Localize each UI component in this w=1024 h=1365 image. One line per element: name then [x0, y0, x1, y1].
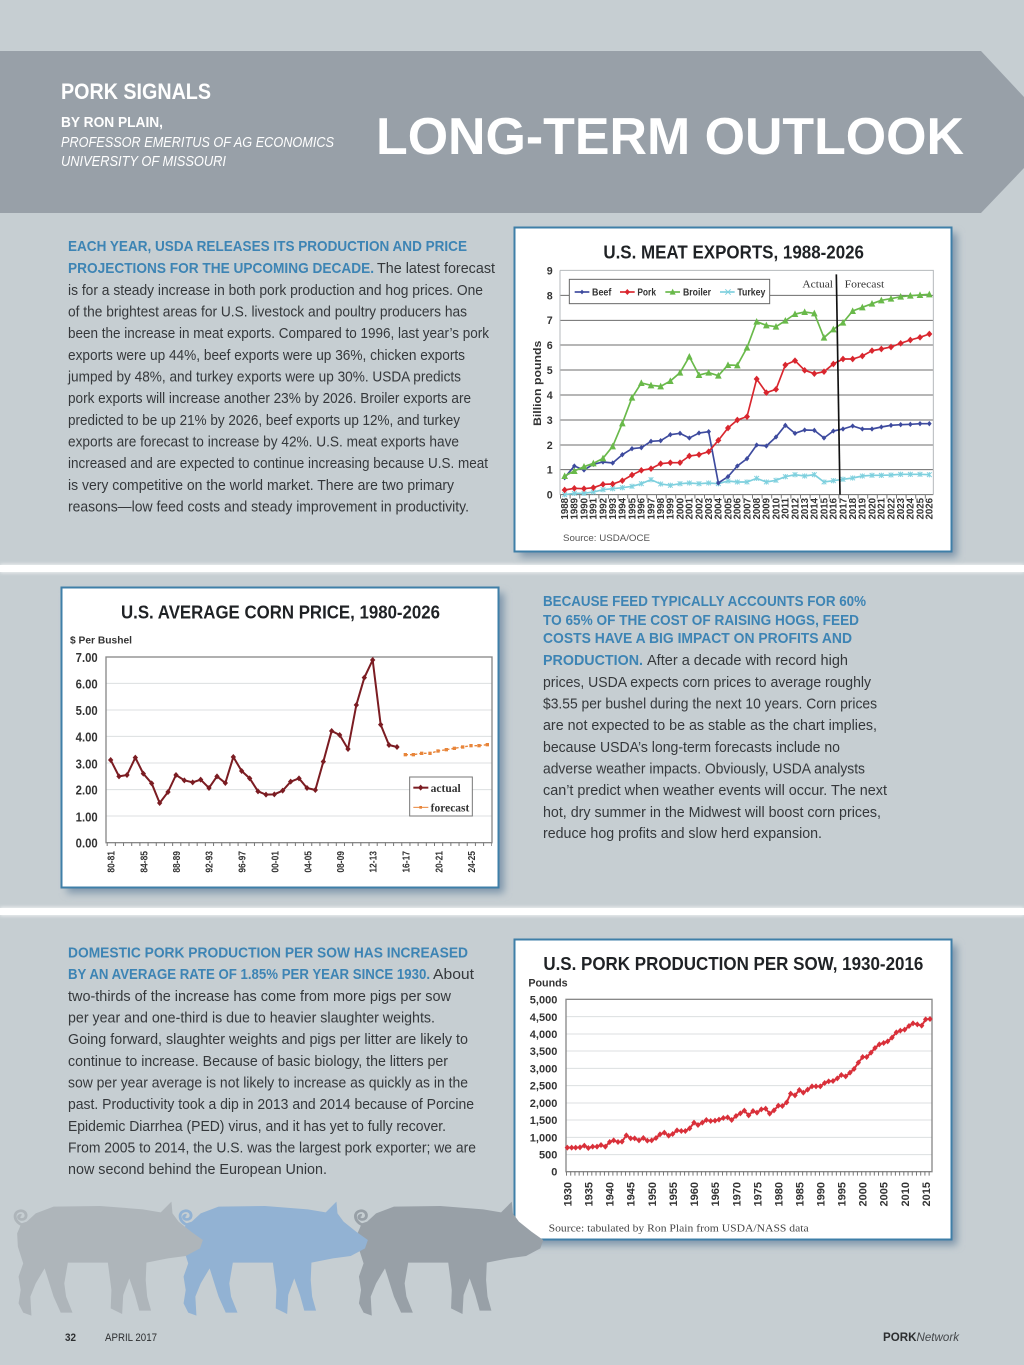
icon: light gray pig	[15, 1202, 203, 1316]
y axis labels: 1,500	[530, 1115, 557, 1127]
x axis labels: 1955	[668, 1182, 680, 1206]
byline: PROFESSOR EMERITUS OF AG ECONOMICS	[61, 134, 334, 151]
text block: meat exports: exports were up 44%, beef exports were up 36%, chicken exports	[68, 347, 465, 364]
text block: feed costs: After a decade with record high	[647, 652, 848, 669]
series: actual	[111, 660, 397, 803]
legend: Broiler	[683, 287, 711, 298]
text block: meat exports: predicted to be up 21% by 2026, beef exports up 12%, and turkey	[68, 412, 460, 429]
series: beef	[565, 424, 929, 483]
x axis year labels: 2008	[752, 497, 763, 519]
x axis year labels: 2007	[742, 498, 753, 519]
x axis labels: 12-13	[369, 850, 380, 873]
text block: production per sow: per year and one-third is due to heavier slaughter weights.	[68, 1010, 435, 1026]
text block: production per sow: From 2005 to 2014, the U.S. was the largest pork exporter; we are	[68, 1140, 476, 1156]
series: pounds per sow	[567, 1019, 930, 1148]
x axis labels: 96-97	[237, 851, 248, 873]
x axis year labels: 2003	[704, 497, 715, 519]
x axis labels: 1930	[563, 1182, 575, 1206]
legend	[569, 279, 770, 304]
x axis labels: 1980	[773, 1182, 785, 1206]
x axis year labels: 2020	[867, 498, 878, 519]
text block: feed costs: BECAUSE FEED TYPICALLY ACCOUNTS FOR 60%	[543, 593, 866, 610]
chart title: U.S. MEAT EXPORTS, 1988-2026	[603, 242, 864, 262]
x axis year labels: 2022	[886, 498, 897, 519]
legend: Pork	[637, 287, 656, 298]
y axis labels: 4	[547, 390, 553, 402]
panel: U.S. meat exports chart	[514, 228, 957, 557]
text block: production per sow: About	[433, 966, 475, 983]
y axis labels: 3,000	[530, 1063, 557, 1075]
y axis labels: 6	[547, 340, 553, 352]
y axis labels: 3	[547, 415, 553, 427]
x axis year labels: 2002	[694, 498, 705, 519]
y axis labels: 1,000	[530, 1132, 557, 1144]
pig silhouettes	[14, 1202, 544, 1316]
x axis year labels: 2001	[685, 497, 696, 519]
x axis year labels: 2018	[848, 497, 859, 519]
x axis year labels: 2024	[906, 497, 917, 519]
y axis labels	[530, 994, 557, 1179]
text block: production per sow: Epidemic Diarrhea (PED) virus, and it has yet to fully recover.	[68, 1118, 446, 1135]
footer: page number and date: 32	[65, 1332, 76, 1344]
text block: meat exports: reasons—low feed costs and steady improvement in productivity.	[68, 498, 469, 516]
x axis year labels: 2000	[675, 498, 686, 519]
y axis labels: 1.00	[76, 809, 98, 824]
x axis labels: 1960	[689, 1182, 701, 1206]
panel: U.S. average corn price chart	[62, 588, 504, 893]
text block: feed costs: adverse weather impacts. Obviously, USDA analysts	[543, 760, 865, 778]
y axis labels: 2.00	[76, 783, 98, 798]
text block: feed costs: TO 65% OF THE COST OF RAISING HOGS, FEED	[543, 612, 859, 629]
y axis title: Billion pounds	[532, 341, 544, 426]
legend: actual	[431, 781, 461, 795]
y axis labels: 4,000	[530, 1029, 557, 1041]
x axis year labels	[560, 497, 936, 519]
source note: Source: USDA/OCE	[563, 533, 650, 543]
y axis labels: 0.00	[76, 836, 98, 851]
x axis labels: 08-09	[336, 850, 347, 873]
x axis year labels: 2023	[896, 497, 907, 519]
icon: blue pig	[180, 1202, 368, 1316]
text block: meat exports: been the increase in meat exports. Compared to 1996, last year’s pork	[68, 325, 489, 342]
x axis year labels: 1996	[637, 497, 648, 519]
x axis year labels: 2019	[858, 497, 869, 519]
text block: meat exports: jumped by 48%, and turkey exports were up 30%. USDA predicts	[67, 368, 461, 386]
y axis labels: 2,500	[530, 1081, 557, 1093]
x axis year labels: 2021	[877, 497, 888, 519]
y axis labels: 1	[547, 465, 553, 477]
series: turkey	[565, 474, 929, 495]
x axis labels: 2000	[858, 1182, 870, 1206]
text block: feed costs: PRODUCTION.	[543, 652, 643, 669]
panel: U.S. pork production per sow chart	[514, 940, 957, 1245]
legend: Beef	[592, 287, 612, 298]
x axis labels: 1970	[731, 1182, 743, 1206]
x axis year labels: 2015	[819, 497, 830, 519]
x axis labels: 92-93	[205, 850, 216, 873]
text block: feed costs: are not expected to be as stable as the chart implies,	[543, 717, 877, 734]
series: broiler	[565, 294, 929, 476]
legend: Turkey	[737, 287, 766, 298]
text block: feed costs: hot, dry summer in the Midwest will boost corn prices,	[543, 804, 881, 821]
text block: meat exports: PROJECTIONS FOR THE UPCOMING DECADE.	[68, 260, 374, 277]
y axis labels: 2	[547, 440, 553, 452]
footer: page number and date: APRIL 2017	[105, 1332, 157, 1344]
legend	[410, 777, 472, 816]
x axis year labels: 1995	[627, 497, 638, 519]
text block: feed costs: $3.55 per bushel during the next 10 years. Corn prices	[543, 696, 877, 712]
x axis year labels: 2017	[838, 498, 849, 519]
text block: meat exports: is for a steady increase in both pork production and hog prices. One	[68, 282, 483, 299]
source note: Source: tabulated by Ron Plain from USDA/NASS data	[549, 1224, 809, 1235]
x axis year labels: 1999	[666, 497, 677, 519]
text block: meat exports: EACH YEAR, USDA RELEASES ITS PRODUCTION AND PRICE	[68, 238, 467, 255]
y axis labels: 2,000	[530, 1098, 557, 1110]
y axis labels: 8	[547, 290, 553, 302]
text block: meat exports	[67, 238, 496, 516]
actual / forecast divider: Forecast	[845, 279, 884, 290]
series: forecast	[405, 745, 487, 755]
x axis labels	[563, 1182, 933, 1206]
x axis labels: 84-85	[139, 850, 150, 873]
x axis year labels: 2025	[915, 497, 926, 519]
x axis labels: 80-81	[107, 850, 118, 873]
x axis labels: 1950	[647, 1182, 659, 1206]
x axis year labels: 1997	[646, 498, 657, 519]
x axis year labels: 1989	[570, 497, 581, 519]
actual / forecast divider	[801, 274, 886, 495]
y axis labels: 5,000	[530, 994, 557, 1006]
chart title: U.S. AVERAGE CORN PRICE, 1980-2026	[121, 602, 440, 622]
text block: feed costs	[543, 593, 888, 842]
x axis labels: 1935	[584, 1182, 596, 1206]
text block: meat exports: exports are forecast to increase by 42%. U.S. meat exports have	[68, 434, 459, 450]
y axis labels: 4,500	[530, 1012, 557, 1024]
text block: production per sow	[68, 944, 476, 1178]
y axis labels	[76, 650, 98, 851]
text block: feed costs: reduce hog profits and slow herd expansion.	[543, 825, 822, 842]
text block: production per sow: past. Productivity took a dip in 2013 and 2014 because of Porcine	[68, 1096, 474, 1113]
x axis year labels: 2006	[733, 497, 744, 519]
x axis year labels: 2009	[762, 497, 773, 519]
series: pork	[565, 334, 929, 490]
x axis labels: 1965	[710, 1182, 722, 1206]
x axis labels: 00-01	[270, 850, 281, 873]
y axis labels: 0	[547, 489, 553, 501]
x axis labels: 2010	[900, 1182, 912, 1206]
text block: meat exports: increased and are expected to continue increasing because U.S. meat	[68, 455, 489, 472]
text block: meat exports: is very competitive on the world market. There are two primary	[68, 477, 454, 494]
y axis labels: 9	[547, 265, 553, 277]
text block: feed costs: because USDA’s long-term forecasts include no	[543, 739, 840, 756]
text block: meat exports: pork exports will increase another 23% by 2026. Broiler exports are	[68, 390, 471, 407]
y axis labels: 5	[547, 365, 553, 377]
text block: production per sow: DOMESTIC PORK PRODUCTION PER SOW HAS INCREASED	[68, 944, 468, 962]
x axis labels: 20-21	[434, 850, 445, 873]
banner arrow shape	[0, 51, 1024, 213]
text block: meat exports: The latest forecast	[377, 260, 496, 277]
y axis labels: 7.00	[76, 650, 98, 665]
text block: production per sow: BY AN AVERAGE RATE OF 1.85% PER YEAR SINCE 1930.	[68, 966, 430, 983]
x axis year labels: 1990	[579, 498, 590, 519]
y axis labels: 3,500	[530, 1046, 557, 1058]
y axis labels: 0	[551, 1167, 557, 1179]
text block: meat exports: of the brightest areas for U.S. livestock and poultry producers has	[68, 304, 467, 320]
x axis year labels: 2016	[829, 497, 840, 519]
x axis year labels: 2010	[771, 498, 782, 519]
x axis labels: 2005	[879, 1182, 891, 1206]
y axis labels: 500	[539, 1150, 557, 1162]
header banner	[0, 51, 1024, 213]
x axis labels: 04-05	[303, 850, 314, 873]
y axis unit: Pounds	[528, 977, 568, 989]
y axis labels: 6.00	[76, 676, 98, 691]
x axis year labels: 1988	[560, 497, 571, 519]
x axis labels: 2015	[921, 1182, 933, 1206]
text block: production per sow: continue to increase. Because of basic biology, the litters per	[68, 1053, 448, 1070]
legend: forecast	[431, 801, 469, 815]
main title: LONG-TERM OUTLOOK	[376, 108, 964, 166]
x axis year labels: 1998	[656, 497, 667, 519]
text block: feed costs: prices, USDA expects corn prices to average roughly	[543, 674, 871, 691]
x axis labels: 24-25	[467, 850, 478, 873]
text block: production per sow: sow per year average is not likely to increase as quickly as in the	[68, 1074, 468, 1092]
y axis labels: 4.00	[76, 729, 98, 744]
x axis year labels: 2013	[800, 497, 811, 519]
x axis labels	[107, 850, 478, 873]
x axis labels: 16-17	[401, 851, 412, 873]
y axis labels	[547, 265, 553, 501]
x axis year labels: 1994	[618, 497, 629, 519]
footer: publication name: PORKNetwork	[883, 1332, 960, 1344]
x axis labels: 1990	[816, 1182, 828, 1206]
text block: feed costs: can’t predict when weather events will occur. The next	[543, 782, 888, 799]
byline	[61, 114, 334, 170]
section label: PORK SIGNALS	[61, 79, 211, 104]
icon: dark gray pig	[355, 1202, 543, 1316]
x axis year labels: 2026	[925, 497, 936, 519]
x axis year labels: 2011	[781, 497, 792, 519]
x axis labels: 1995	[837, 1182, 849, 1206]
text block: production per sow: now second behind the European Union.	[68, 1161, 327, 1178]
x axis year labels: 2005	[723, 497, 734, 519]
y axis labels: 5.00	[76, 703, 98, 718]
y axis labels: 7	[547, 315, 553, 327]
x axis year labels: 1992	[598, 498, 609, 519]
text block: feed costs: COSTS HAVE A BIG IMPACT ON PROFITS AND	[543, 630, 852, 647]
text block: production per sow: two-thirds of the increase has come from more pigs per sow	[68, 988, 451, 1005]
y axis labels: 3.00	[76, 756, 98, 771]
actual / forecast divider: Actual	[802, 279, 833, 290]
x axis year labels: 1993	[608, 497, 619, 519]
byline: UNIVERSITY OF MISSOURI	[61, 153, 226, 170]
x axis year labels: 2004	[714, 497, 725, 519]
x axis year labels: 2012	[790, 498, 801, 519]
byline: BY RON PLAIN,	[61, 114, 163, 131]
x axis labels: 1985	[794, 1182, 806, 1206]
x axis year labels: 1991	[589, 497, 600, 519]
x axis labels: 88-89	[172, 850, 183, 873]
footer: page number and date	[65, 1332, 157, 1344]
x axis labels: 1945	[626, 1182, 638, 1206]
text block: production per sow: Going forward, slaughter weights and pigs per litter are likely to	[68, 1031, 468, 1048]
x axis year labels: 2014	[810, 497, 821, 519]
y axis unit: $ Per Bushel	[70, 635, 132, 646]
x axis labels: 1940	[605, 1182, 617, 1206]
x axis labels: 1975	[752, 1182, 764, 1206]
